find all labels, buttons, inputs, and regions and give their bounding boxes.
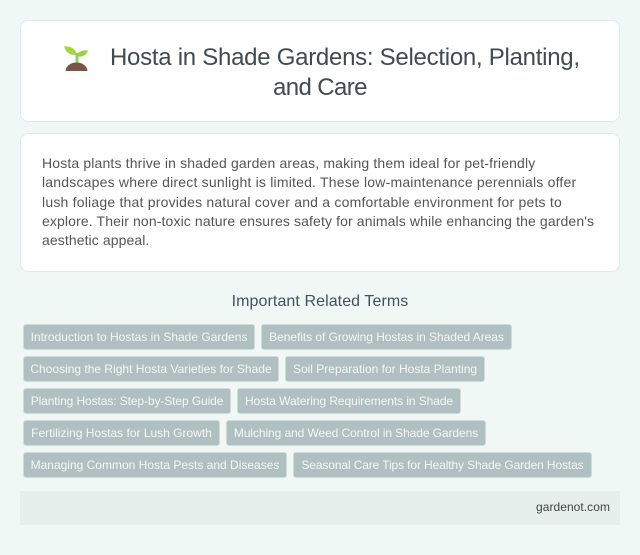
title <box>110 44 580 101</box>
panel: description card <box>20 133 620 272</box>
footer: gardenot.com <box>536 500 610 514</box>
tag: Fertilizing Hostas for Lush Growth <box>31 426 212 440</box>
panel: title card <box>20 20 620 122</box>
tag: Introduction to Hostas in Shade Gardens <box>31 330 247 344</box>
tag: Soil Preparation for Hosta Planting <box>293 362 477 376</box>
heading: important related terms: Important Related Terms <box>232 293 408 310</box>
tag: Mulching and Weed Control in Shade Gardens <box>234 426 478 440</box>
title: Hosta in Shade Gardens: Selection, Planting, <box>110 44 580 71</box>
description text: Hosta plants thrive in shaded garden areas, making them ideal for pet-friendly <box>42 155 535 171</box>
panel: related term tags <box>23 324 592 478</box>
tag <box>23 452 287 478</box>
tag <box>285 356 485 382</box>
tag: Hosta Watering Requirements in Shade <box>245 394 453 408</box>
description text: aesthetic appeal. <box>42 232 149 248</box>
tag: Seasonal Care Tips for Healthy Shade Garden Hostas <box>301 458 584 472</box>
title: and Care <box>273 74 367 101</box>
description text <box>42 155 594 248</box>
tag: Managing Common Hosta Pests and Diseases <box>31 458 279 472</box>
tag <box>226 420 486 446</box>
tag: Benefits of Growing Hostas in Shaded Areas <box>269 330 504 344</box>
description text: lush foliage that provides natural cover and a comfortable environment for pets to <box>42 194 562 210</box>
tag: Planting Hostas: Step-by-Step Guide <box>31 394 223 408</box>
tag <box>23 324 255 350</box>
description text: landscapes where direct sunlight is limited. These low-maintenance perennials offer <box>42 174 576 190</box>
description text: explore. Their non-toxic nature ensures safety for animals while enhancing the garden's <box>42 213 594 229</box>
tag <box>23 388 231 414</box>
tag <box>23 420 220 446</box>
tag: Choosing the Right Hosta Varieties for Shade <box>30 362 272 376</box>
icon: seedling <box>64 46 88 71</box>
tag <box>261 324 512 350</box>
tag <box>23 356 279 382</box>
tag <box>293 452 592 478</box>
tag <box>237 388 461 414</box>
footer <box>20 491 620 525</box>
